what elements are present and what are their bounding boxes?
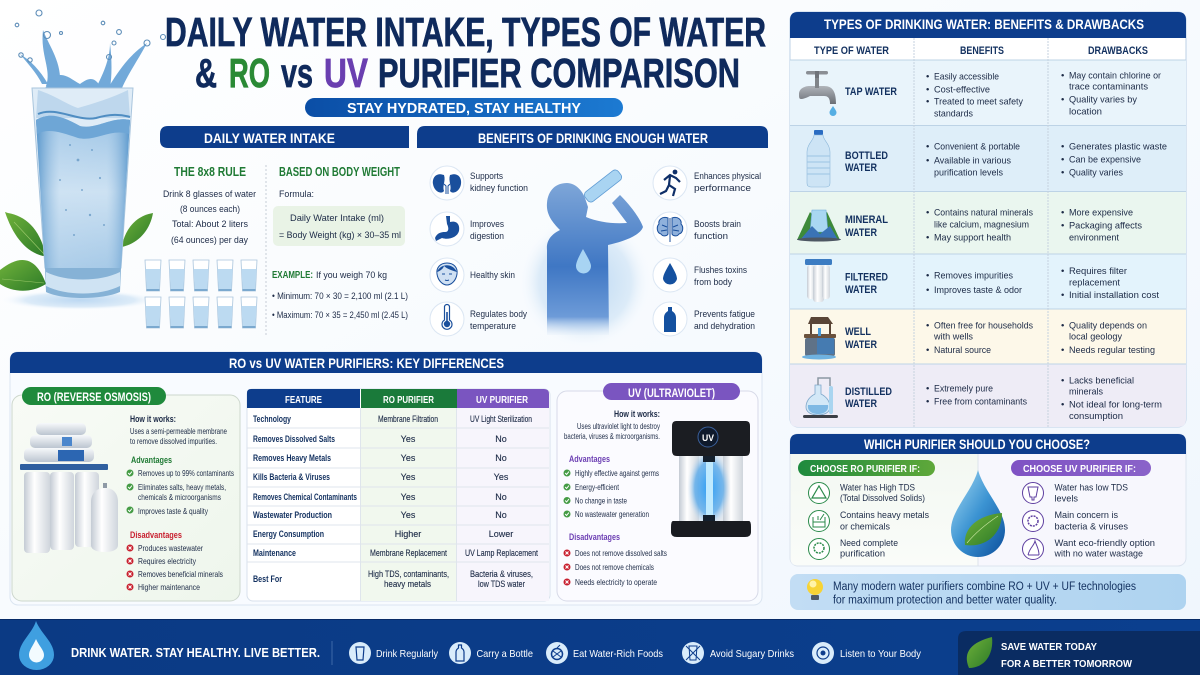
benefit label: fatigue: Prevents fatigue xyxy=(694,309,755,320)
row: tap water: • xyxy=(926,84,929,96)
row: well water: with wells xyxy=(933,332,973,342)
icon: tap xyxy=(799,71,836,116)
row: bottled water: Can be expensive xyxy=(1069,154,1141,166)
text block: example calculation xyxy=(272,270,408,321)
list: UV disadvantages: Disadvantages xyxy=(569,532,620,543)
table: RO vs UV comparison: High TDS, contaminants, xyxy=(368,569,449,579)
benefit label: flushes toxins xyxy=(694,265,747,288)
icon: bottle xyxy=(807,130,830,187)
row: tap water: • xyxy=(926,72,929,82)
benefit label: fatigue xyxy=(694,309,755,332)
benefit label: temperature xyxy=(470,309,527,332)
text block: example calculation: If you weigh 70 kg xyxy=(316,270,387,281)
row: well water: Needs regular testing xyxy=(1069,345,1155,356)
table: RO vs UV comparison: Energy Consumption xyxy=(253,529,324,539)
table: RO vs UV comparison: Membrane Filtration xyxy=(378,414,438,424)
tip: drink regularly xyxy=(349,642,439,664)
column: choose UV purifier: Want eco-friendly option xyxy=(1054,538,1155,549)
table: RO vs UV comparison: Maintenance xyxy=(253,548,296,558)
icon: water drop with leaf xyxy=(951,470,1005,557)
column: choose RO purifier: purification xyxy=(840,548,885,560)
table: RO vs UV comparison: Membrane Replacement xyxy=(370,548,447,558)
row: bottled water: • xyxy=(926,156,929,166)
table: RO vs UV comparison: Yes xyxy=(401,492,416,502)
icon: green leaf xyxy=(967,637,992,668)
table: RO vs UV comparison: Lower xyxy=(489,529,513,539)
row: bottled water: WATER xyxy=(845,162,877,174)
row: tap water: TAP WATER xyxy=(845,86,897,98)
title: & xyxy=(195,50,217,96)
row: tap water xyxy=(799,70,1161,120)
column: choose RO purifier: Need complete xyxy=(840,538,898,549)
row: bottled water: Generates plastic waste xyxy=(1069,142,1167,152)
table: RO vs UV comparison: Removes Heavy Metals xyxy=(253,453,331,463)
icon: face xyxy=(430,258,464,292)
row: well water: Natural source xyxy=(934,345,991,356)
list: RO disadvantages: Disadvantages xyxy=(130,530,182,541)
callout: save water today xyxy=(958,631,1200,675)
column headers xyxy=(814,45,1148,57)
row: tap water: • xyxy=(1061,70,1064,82)
heading: benefits: BENEFITS OF DRINKING ENOUGH WATER xyxy=(478,130,708,146)
benefit label: skin: Healthy skin xyxy=(470,270,515,281)
row: distilled water xyxy=(803,376,1162,422)
title: PURIFIER COMPARISON xyxy=(378,50,740,96)
icon: filter xyxy=(805,259,832,302)
table: RO vs UV comparison: UV Light Sterilization xyxy=(470,414,532,424)
list: RO advantages: Removes up to 99% contaminants xyxy=(138,468,234,478)
row: distilled water: WATER xyxy=(845,398,877,410)
table: RO vs UV comparison: Removes Dissolved Salts xyxy=(253,434,335,444)
text block: example calculation: • Maximum: 70 × 35 = 2,450 ml (2.45 L) xyxy=(272,310,408,321)
row: filtered water: Initial installation cost xyxy=(1069,290,1159,301)
row: distilled water: Lacks beneficial xyxy=(1069,376,1134,386)
illustration: RO filter system xyxy=(20,423,118,553)
icon: thermometer xyxy=(430,302,464,336)
table: RO vs UV comparison: Higher xyxy=(395,529,421,539)
icon: stomach xyxy=(430,212,464,246)
row: distilled water: consumption xyxy=(1069,411,1123,422)
column headers: TYPE OF WATER xyxy=(814,45,889,57)
text block: how UV works: bacteria, viruses & microorganisms. xyxy=(564,431,660,441)
row: well water: • xyxy=(1061,320,1064,332)
callout: save water today: SAVE WATER TODAY xyxy=(1001,641,1097,653)
table: RO vs UV comparison: Removes Chemical Contaminants xyxy=(253,492,357,502)
title xyxy=(165,9,766,96)
table: RO vs UV comparison: Wastewater Production xyxy=(253,510,332,520)
list: RO advantages: chemicals & microorganisms xyxy=(138,492,221,502)
row: tap water: Treated to meet safety xyxy=(934,96,1023,108)
row: tap water: May contain chlorine or xyxy=(1069,70,1161,82)
icon: well xyxy=(802,317,836,360)
benefit label: flushes toxins: from body xyxy=(694,277,732,288)
list: UV disadvantages: Does not remove dissolved salts xyxy=(575,548,667,558)
text block: the 8x8 rule: Total: About 2 liters xyxy=(172,219,248,230)
row: bottled water: Convenient & portable xyxy=(934,142,1020,152)
title: RO xyxy=(229,50,270,96)
table: types of drinking water xyxy=(790,12,1186,427)
row: well water: • xyxy=(1061,345,1064,356)
text block: how RO works xyxy=(130,414,227,446)
text block: how UV works: How it works: xyxy=(614,409,660,420)
row: filtered water: • xyxy=(926,285,929,296)
tip: eat water-rich foods xyxy=(546,642,663,664)
table: RO vs UV comparison: low TDS water xyxy=(478,579,525,589)
row: distilled water: • xyxy=(926,384,929,394)
benefit label: kidney xyxy=(470,171,528,194)
label: RO reverse osmosis: RO (REVERSE OSMOSIS) xyxy=(37,390,151,404)
row: tap water: Quality varies by xyxy=(1069,94,1137,106)
icon: kidneys xyxy=(430,166,464,200)
row: mineral water: May support health xyxy=(934,232,1011,244)
table: RO vs UV comparison: RO PURIFIER xyxy=(383,394,434,406)
icon: water drop xyxy=(653,258,687,292)
icon: footer water drop xyxy=(19,621,54,670)
callout: combined technologies tip: for maximum protection and better water quality. xyxy=(833,594,1057,606)
row: mineral water: WATER xyxy=(845,227,877,239)
table: RO vs UV comparison: Yes xyxy=(401,434,416,444)
column: choose RO purifier: CHOOSE RO PURIFIER IF: xyxy=(810,463,920,475)
benefit label: temperature: Regulates body xyxy=(470,309,527,320)
text block: based on body weight: Daily Water Intake (ml) xyxy=(290,213,384,224)
row: mineral water: More expensive xyxy=(1069,208,1133,218)
list: RO disadvantages xyxy=(126,530,223,592)
panel: RO vs UV water purifiers xyxy=(10,352,762,605)
row: tap water: Cost-effective xyxy=(934,84,990,96)
text block: the 8x8 rule: (64 ounces) per day xyxy=(171,235,248,246)
row: bottled water: BOTTLED xyxy=(845,150,888,162)
tip: eat water-rich foods: Eat Water-Rich Foods xyxy=(573,648,663,660)
tip: listen to your body xyxy=(812,642,922,664)
benefit label: digestion: Improves xyxy=(470,219,504,230)
row: well water: • xyxy=(926,345,929,356)
row: filtered water: • xyxy=(926,270,929,282)
table: RO vs UV comparison: No xyxy=(495,492,507,502)
icon: bottle xyxy=(653,302,687,336)
benefit label: digestion xyxy=(470,219,504,242)
benefit label: fatigue: and dehydration xyxy=(694,321,755,332)
text block: based on body weight xyxy=(273,164,405,246)
table: RO vs UV comparison: Yes xyxy=(401,453,416,463)
callout: save water today: FOR A BETTER TOMORROW xyxy=(1001,658,1132,670)
heading: RO vs UV key differences xyxy=(10,352,762,373)
row: well water: Often free for households xyxy=(934,320,1033,332)
text block: how UV works xyxy=(564,409,660,441)
row: mineral water: environment xyxy=(1069,232,1119,244)
row: mineral water: Packaging affects xyxy=(1069,220,1142,232)
panel: daily water intake xyxy=(145,126,409,335)
table: RO vs UV comparison xyxy=(247,389,550,601)
column: choose UV purifier: Main concern is xyxy=(1054,510,1118,521)
icon: distillation flask xyxy=(803,378,838,418)
row: bottled water: • xyxy=(1061,142,1064,152)
table: RO vs UV comparison: heavy metals xyxy=(384,579,431,589)
icon: brain xyxy=(653,212,687,246)
row: mineral water: like calcium, magnesium xyxy=(934,220,1029,230)
column: choose RO purifier: Contains heavy metals xyxy=(840,510,929,521)
table: RO vs UV comparison: Kills Bacteria & Viruses xyxy=(253,472,330,482)
row: bottled water: • xyxy=(926,142,929,152)
benefit label: digestion: digestion xyxy=(470,231,504,242)
icon: mineral water xyxy=(797,210,841,242)
row: distilled water: Not ideal for long-term xyxy=(1069,400,1162,410)
table: RO vs UV comparison: Yes xyxy=(401,472,416,482)
panel: benefits of drinking enough water xyxy=(417,126,768,348)
column: choose UV purifier: with no water wastage xyxy=(1054,548,1143,560)
panel: which purifier should you choose xyxy=(790,434,1186,566)
list: RO advantages: Improves taste & quality xyxy=(138,506,209,516)
row: mineral water: • xyxy=(926,208,929,218)
row: well water: WATER xyxy=(845,339,877,351)
benefit label: physical performance xyxy=(694,171,761,194)
row: filtered water: Requires filter xyxy=(1069,266,1127,277)
heading: daily water intake xyxy=(160,126,409,148)
list: UV disadvantages: Needs electricity to operate xyxy=(575,577,657,587)
row: mineral water: MINERAL xyxy=(845,214,888,226)
benefit label: physical performance: performance xyxy=(694,183,751,194)
heading: types of drinking water xyxy=(790,12,1186,38)
label: UV ultraviolet: UV (ULTRAVIOLET) xyxy=(628,388,715,400)
text block: the 8x8 rule xyxy=(163,164,256,246)
column: choose UV purifier: CHOOSE UV PURIFIER IF: xyxy=(1023,463,1136,475)
label: RO reverse osmosis xyxy=(22,387,166,405)
table: RO vs UV comparison: Bacteria & viruses, xyxy=(470,569,533,579)
illustration: UV purifier: UV xyxy=(702,433,714,443)
row: filtered water: • xyxy=(1061,266,1064,277)
slogan: DRINK WATER. STAY HEALTHY. LIVE BETTER. xyxy=(71,645,320,660)
tip: drink regularly: Drink Regularly xyxy=(376,648,439,660)
list: RO advantages xyxy=(126,455,234,516)
tip: carry a bottle xyxy=(449,642,533,664)
row: filtered water: FILTERED xyxy=(845,272,888,284)
list: UV disadvantages xyxy=(564,532,667,587)
row: tap water: • xyxy=(926,96,929,108)
tip: listen to your body: Listen to Your Body xyxy=(840,648,922,660)
text block: the 8x8 rule: Drink 8 glasses of water xyxy=(163,189,256,200)
table: RO vs UV comparison: UV PURIFIER xyxy=(476,394,528,406)
subtitle pill: STAY HYDRATED, STAY HEALTHY xyxy=(347,101,581,117)
panel: UV ultraviolet xyxy=(557,383,758,601)
row: tap water: • xyxy=(1061,94,1064,106)
text block: based on body weight: Formula: xyxy=(279,189,314,200)
table: RO vs UV comparison: Best For xyxy=(253,574,282,584)
heading: RO vs UV key differences: RO vs UV WATER PURIFIERS: KEY DIFFERENCES xyxy=(229,355,504,371)
list: UV advantages xyxy=(564,454,659,519)
column: choose UV purifier: levels xyxy=(1054,494,1078,504)
list: UV advantages: No wastewater generation xyxy=(575,509,649,519)
benefit label: brain function: function xyxy=(694,231,728,242)
row: filtered water xyxy=(805,259,1159,302)
callout: combined technologies tip xyxy=(790,574,1186,610)
column: choose UV purifier: bacteria & viruses xyxy=(1054,522,1128,532)
row: filtered water: • xyxy=(1061,290,1064,301)
row: distilled water: • xyxy=(926,396,929,408)
column: choose RO purifier xyxy=(798,460,935,560)
subtitle pill xyxy=(305,98,623,117)
icon: light bulb xyxy=(807,579,823,600)
table: RO vs UV comparison: Yes xyxy=(494,472,509,482)
text block: how RO works: Uses a semi-permeable membrane xyxy=(130,426,227,436)
callout: combined technologies tip: Many modern water purifiers combine RO + UV + UF technologies xyxy=(833,581,1136,593)
column: choose RO purifier: Water has High TDS xyxy=(840,482,915,494)
title: vs xyxy=(281,50,313,96)
row: tap water: trace contaminants xyxy=(1069,82,1148,92)
list: RO disadvantages: Requires electricity xyxy=(138,556,197,566)
column headers: DRAWBACKS xyxy=(1088,45,1148,57)
row: mineral water: • xyxy=(1061,208,1064,218)
row: filtered water: Removes impurities xyxy=(934,270,1013,282)
row: tap water: standards xyxy=(934,108,973,120)
list: UV advantages: Highly effective against germs xyxy=(575,468,659,478)
row: well water: WELL xyxy=(845,326,871,338)
heading: daily water intake: DAILY WATER INTAKE xyxy=(204,130,335,146)
benefit label: brain function: Boosts brain xyxy=(694,219,741,230)
row: distilled water: DISTILLED xyxy=(845,386,892,398)
row: bottled water: purification levels xyxy=(934,168,1003,178)
heading: which purifier xyxy=(790,434,1186,454)
column: choose RO purifier: (Total Dissolved Solids) xyxy=(840,493,925,504)
title: UV xyxy=(324,50,368,96)
text block: based on body weight: BASED ON BODY WEIGHT xyxy=(279,164,400,179)
row: mineral water: • xyxy=(926,232,929,244)
table: RO vs UV comparison: Yes xyxy=(401,510,416,520)
list: RO advantages: Eliminates salts, heavy metals, xyxy=(138,482,226,492)
row: tap water: Easily accessible xyxy=(934,72,999,82)
text block: example calculation: • Minimum: 70 × 30 = 2,100 ml (2.1 L) xyxy=(272,291,408,302)
row: well water: • xyxy=(926,320,929,332)
list: RO disadvantages: Produces wastewater xyxy=(138,543,203,553)
column: choose UV purifier xyxy=(1011,460,1155,560)
heading: which purifier: WHICH PURIFIER SHOULD YOU CHOOSE? xyxy=(864,436,1090,452)
row: bottled water: • xyxy=(1061,168,1064,178)
row: bottled water: • xyxy=(1061,154,1064,166)
tip: carry a bottle: Carry a Bottle xyxy=(476,648,533,660)
row: tap water: location xyxy=(1069,106,1102,118)
text block: the 8x8 rule: THE 8x8 RULE xyxy=(174,164,246,179)
row: well water xyxy=(802,317,1155,360)
row: well water: local geology xyxy=(1069,332,1122,342)
icon: runner xyxy=(653,166,687,200)
text block: the 8x8 rule: (8 ounces each) xyxy=(180,204,240,215)
list: UV advantages: No change in taste xyxy=(575,496,627,506)
table: RO vs UV comparison: No xyxy=(495,434,507,444)
benefit label: temperature: temperature xyxy=(470,321,516,332)
benefit label: physical performance: Enhances physical xyxy=(694,171,761,182)
row: filtered water: Improves taste & odor xyxy=(934,285,1022,296)
row: distilled water: Free from contaminants xyxy=(934,396,1027,408)
list: UV advantages: Energy-efficient xyxy=(575,482,619,492)
text block: how RO works: How it works: xyxy=(130,414,176,425)
list: RO disadvantages: Higher maintenance xyxy=(138,582,200,592)
benefit label: kidney: Supports xyxy=(470,171,503,182)
row: bottled water: Available in various xyxy=(934,156,1011,166)
icon: eight by eight glasses xyxy=(145,260,257,328)
label: UV ultraviolet xyxy=(603,383,740,400)
table: RO vs UV comparison: FEATURE xyxy=(285,394,322,406)
title: DAILY WATER INTAKE, TYPES OF WATER xyxy=(165,9,766,55)
list: UV disadvantages: Does not remove chemicals xyxy=(575,562,654,572)
table: RO vs UV comparison: UV Lamp Replacement xyxy=(465,548,538,558)
illustration: UV purifier xyxy=(671,421,751,537)
panel: RO reverse osmosis xyxy=(12,387,240,601)
row: bottled water xyxy=(807,130,1167,187)
benefit label: brain function xyxy=(694,219,741,242)
text block: example calculation: EXAMPLE: xyxy=(272,270,313,281)
row: bottled water: Quality varies xyxy=(1069,168,1123,178)
row: filtered water: WATER xyxy=(845,284,877,296)
row: mineral water: Contains natural minerals xyxy=(934,208,1033,218)
table: RO vs UV comparison: Technology xyxy=(253,414,291,424)
list: RO disadvantages: Removes beneficial minerals xyxy=(138,569,223,579)
row: distilled water: minerals xyxy=(1069,386,1103,398)
column: choose RO purifier: or chemicals xyxy=(840,522,890,532)
text block: how RO works: to remove dissolved impurities. xyxy=(130,436,217,446)
tip: avoid sugary drinks: Avoid Sugary Drinks xyxy=(710,648,794,660)
row: well water: Quality depends on xyxy=(1069,320,1147,332)
illustration: water glass with splash and leaves xyxy=(0,10,166,310)
footer banner xyxy=(0,619,1200,675)
list: UV advantages: Advantages xyxy=(569,454,610,465)
benefit label: flushes toxins: Flushes toxins xyxy=(694,265,747,276)
text block: based on body weight: = Body Weight (kg) × 30–35 ml xyxy=(279,230,401,241)
column: choose UV purifier: Water has low TDS xyxy=(1054,482,1128,494)
row: distilled water: Extremely pure xyxy=(934,384,993,394)
table: RO vs UV comparison: No xyxy=(495,453,507,463)
heading: benefits xyxy=(417,126,768,148)
column headers: BENEFITS xyxy=(960,45,1004,57)
row: mineral water xyxy=(797,208,1142,244)
benefit label: kidney: kidney function xyxy=(470,183,528,194)
heading: types of drinking water: TYPES OF DRINKING WATER: BENEFITS & DRAWBACKS xyxy=(824,16,1144,32)
illustration: person drinking from bottle xyxy=(519,168,651,348)
row: mineral water: • xyxy=(1061,220,1064,232)
text block: how UV works: Uses ultraviolet light to destroy xyxy=(577,421,660,431)
row: distilled water: • xyxy=(1061,376,1064,386)
table: RO vs UV comparison: No xyxy=(495,510,507,520)
row: filtered water: replacement xyxy=(1069,278,1120,288)
row: distilled water: • xyxy=(1061,400,1064,410)
tip: avoid sugary drinks xyxy=(682,642,794,664)
list: RO advantages: Advantages xyxy=(131,455,172,466)
